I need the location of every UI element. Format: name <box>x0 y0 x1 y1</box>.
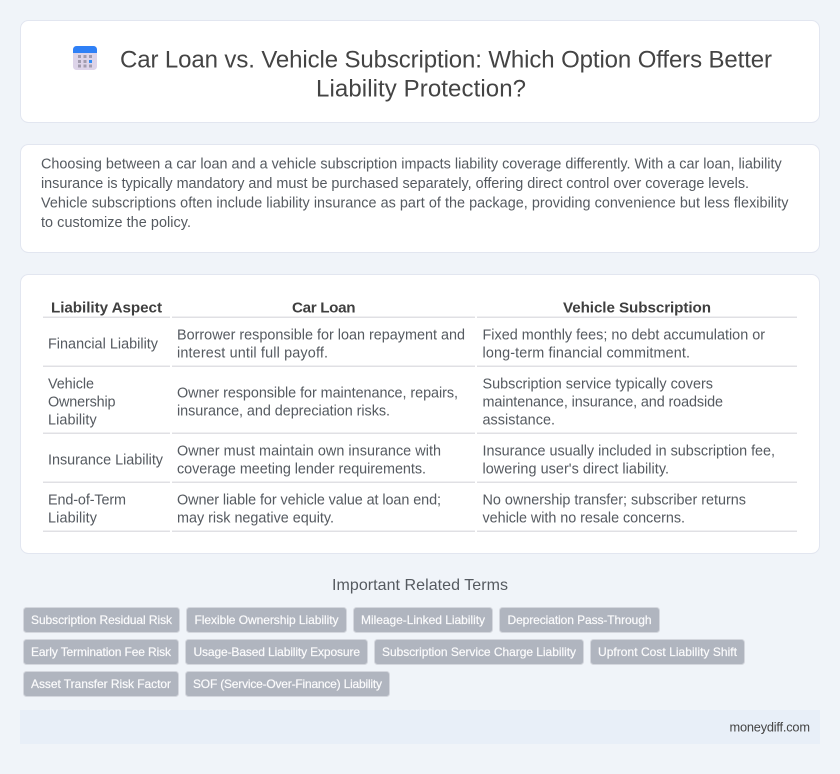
table row: end-of-term liability: Owner liable for vehicle value at loan end; <box>177 492 441 508</box>
table header: Vehicle Subscription <box>563 299 711 316</box>
table row: vehicle ownership liability: Owner responsible for maintenance, repairs, <box>177 385 458 401</box>
table header <box>51 299 711 316</box>
table row: vehicle ownership liability: Liability <box>48 412 97 428</box>
icon: calendar <box>73 46 97 70</box>
tag group: related terms: Subscription Residual Risk <box>31 613 173 627</box>
table row: financial liability: Fixed monthly fees; no debt accumulation or <box>482 327 765 343</box>
table row: insurance liability: Insurance usually included in subscription fee, <box>482 443 775 459</box>
table row: financial liability: Borrower responsible for loan repayment and <box>177 327 465 343</box>
table row: vehicle ownership liability: Vehicle <box>48 376 94 392</box>
table row: insurance liability <box>48 443 775 477</box>
table row: financial liability: interest until full payoff. <box>177 345 328 361</box>
text block: intro paragraph: Vehicle subscriptions often include liability insurance as part of the package, providing convenience but less flexibility <box>41 196 789 212</box>
tag group: related terms: Upfront Cost Liability Shift <box>598 645 738 659</box>
title <box>120 46 772 102</box>
table row: insurance liability: Insurance Liability <box>48 452 164 468</box>
table row: end-of-term liability: No ownership transfer; subscriber returns <box>482 492 746 508</box>
panel: introduction <box>20 144 820 252</box>
table header: Liability Aspect <box>51 299 162 316</box>
heading: important related terms: Important Related Terms <box>332 577 508 594</box>
text block: intro paragraph <box>41 156 789 231</box>
table row: vehicle ownership liability: maintenance, insurance, and roadside <box>482 394 723 410</box>
title: Liability Protection? <box>316 76 526 102</box>
tag group: related terms: Depreciation Pass-Through <box>508 613 652 627</box>
panel: comparison table <box>20 274 820 554</box>
panel: title header <box>20 20 820 122</box>
table row: vehicle ownership liability: assistance. <box>482 412 555 428</box>
tag group: related terms <box>24 608 744 696</box>
text block: intro paragraph: insurance is typically mandatory and must be purchased separately, offering direct control over coverage levels. <box>41 176 749 192</box>
table row: financial liability: Financial Liability <box>48 336 159 352</box>
tag group: related terms: Asset Transfer Risk Factor <box>31 677 171 691</box>
table row: vehicle ownership liability <box>48 376 723 428</box>
title: Car Loan vs. Vehicle Subscription: Which Option Offers Better <box>120 46 772 74</box>
table row: financial liability <box>48 327 765 361</box>
table row: insurance liability: Owner must maintain own insurance with <box>177 443 441 459</box>
table header: Car Loan <box>292 299 356 316</box>
tag group: related terms: Early Termination Fee Risk <box>31 645 172 659</box>
text block: intro paragraph: Choosing between a car loan and a vehicle subscription impacts liability coverage differently. With a car loan, liability <box>41 156 782 172</box>
table row: vehicle ownership liability: insurance, and depreciation risks. <box>177 403 390 419</box>
table row: end-of-term liability: may risk negative equity. <box>177 510 334 526</box>
tag group: related terms: Usage-Based Liability Exposure <box>194 645 360 659</box>
footer: moneydiff.com <box>730 719 810 734</box>
tag group: related terms: SOF (Service-Over-Finance) Liability <box>193 677 382 691</box>
table row: insurance liability: lowering user's direct liability. <box>482 461 669 477</box>
tag group: related terms: Flexible Ownership Liability <box>194 613 338 627</box>
tag group: related terms: Mileage-Linked Liability <box>361 613 485 627</box>
text block: intro paragraph: to customize the policy. <box>41 215 191 231</box>
table row: end-of-term liability: Liability <box>48 510 98 526</box>
table row: end-of-term liability <box>48 492 746 526</box>
tag group: related terms: Subscription Service Charge Liability <box>382 645 576 659</box>
table row: financial liability: long-term financial commitment. <box>482 345 690 361</box>
table row: end-of-term liability: End-of-Term <box>48 492 126 508</box>
table row: insurance liability: coverage meeting lender requirements. <box>177 461 426 477</box>
table row: end-of-term liability: vehicle with no resale concerns. <box>482 510 685 526</box>
table row: vehicle ownership liability: Ownership <box>48 394 116 410</box>
table row: vehicle ownership liability: Subscription service typically covers <box>482 376 713 392</box>
footer <box>20 710 820 744</box>
